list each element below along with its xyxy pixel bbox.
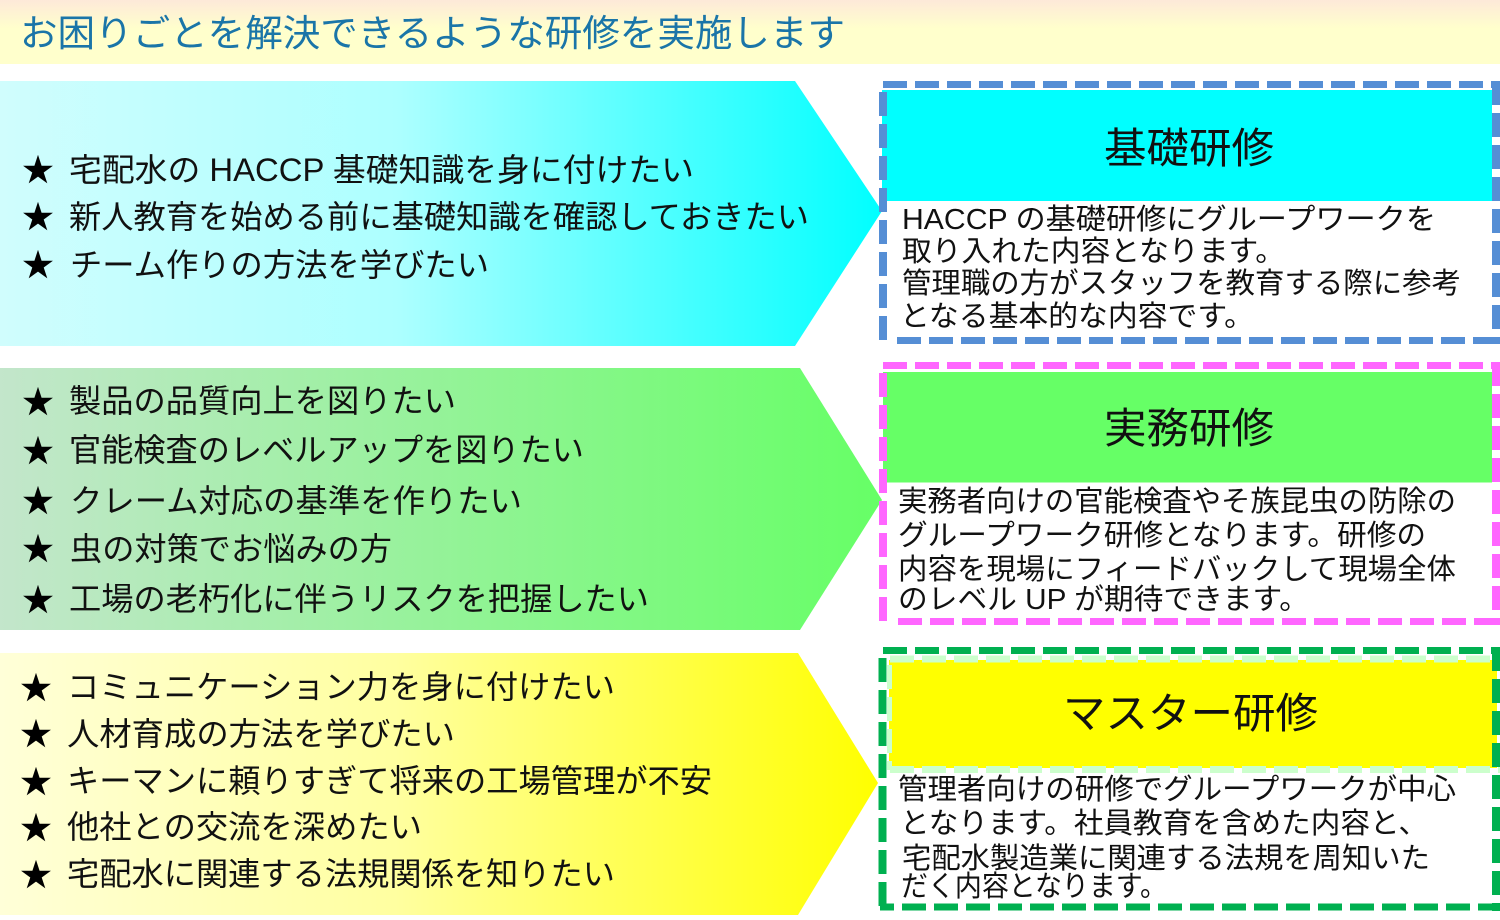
- list item 3: ★: [22, 247, 54, 283]
- description: practical training: [898, 485, 1456, 616]
- list item 5: ★: [20, 857, 52, 893]
- description: practical training: 内容を現場にフィードバックして現場全体: [898, 553, 1456, 586]
- header: basic training: 基礎研修: [1104, 125, 1274, 172]
- list item 4: ★: [20, 810, 52, 846]
- header: practical training: 実務研修: [1104, 405, 1274, 452]
- list item 2: 人材育成の方法を学びたい: [67, 716, 455, 752]
- description: master training: [898, 773, 1456, 903]
- list item 1: 宅配水の HACCP 基礎知識を身に付けたい: [69, 152, 694, 188]
- list item 5: ★: [22, 582, 54, 618]
- description: basic training: 取り入れた内容となります。: [902, 235, 1285, 268]
- list item 3: ★: [22, 483, 54, 519]
- description: master training: 宅配水製造業に関連する法規を周知いた: [902, 842, 1430, 875]
- description: practical training: 実務者向けの官能検査やそ族昆虫の防除の: [898, 485, 1456, 518]
- list item 4: ★: [22, 531, 54, 567]
- description: practical training: のレベル UP が期待できます。: [898, 583, 1309, 616]
- list item 3: ★: [20, 764, 52, 800]
- list item 2: ★: [22, 199, 54, 235]
- list item 5: 宅配水に関連する法規関係を知りたい: [67, 856, 615, 892]
- list item 3: チーム作りの方法を学びたい: [70, 247, 489, 283]
- list item 4: 虫の対策でお悩みの方: [70, 531, 392, 567]
- header: practical training: [883, 372, 1492, 482]
- description: master training: だく内容となります。: [901, 870, 1167, 903]
- description: basic training: [900, 203, 1461, 333]
- list item 3: キーマンに頼りすぎて将来の工場管理が不安: [67, 763, 712, 799]
- list item 3: クレーム対応の基準を作りたい: [70, 483, 522, 519]
- panel: basic training: [882, 81, 1500, 344]
- list item 2: 新人教育を始める前に基礎知識を確認しておきたい: [69, 199, 809, 235]
- description: basic training: HACCP の基礎研修にグループワークを: [902, 203, 1436, 236]
- list item 1: ★: [20, 670, 52, 706]
- header: basic training: [882, 90, 1492, 201]
- panel: master training: [880, 647, 1500, 911]
- list item 1: ★: [22, 384, 54, 420]
- header: master training: [889, 659, 1500, 770]
- description: practical training: グループワーク研修となります。研修の: [898, 519, 1426, 552]
- list item 5: 工場の老朽化に伴うリスクを把握したい: [69, 581, 649, 617]
- list item 1: コミュニケーション力を身に付けたい: [67, 669, 615, 705]
- panel: practical training needs arrow: [0, 368, 882, 630]
- description: master training: となります。社員教育を含めた内容と、: [900, 807, 1428, 840]
- panel: practical training: [883, 362, 1500, 625]
- list item 2: ★: [22, 433, 54, 469]
- description: master training: 管理者向けの研修でグループワークが中心: [898, 773, 1456, 806]
- title: お困りごとを解決できるような研修を実施します: [20, 13, 845, 54]
- list item 4: 他社との交流を深めたい: [67, 809, 422, 845]
- list item 2: ★: [20, 716, 52, 752]
- list item 1: ★: [22, 152, 54, 188]
- header: master training: マスター研修: [1063, 690, 1318, 737]
- description: basic training: となる基本的な内容です。: [900, 300, 1254, 333]
- title band: [0, 0, 1500, 64]
- description: basic training: 管理職の方がスタッフを教育する際に参考: [902, 267, 1461, 300]
- list item 2: 官能検査のレベルアップを図りたい: [69, 432, 584, 468]
- panel: master training needs arrow: [0, 653, 878, 915]
- panel: basic training needs arrow: [0, 81, 882, 346]
- list item 1: 製品の品質向上を図りたい: [69, 383, 456, 419]
